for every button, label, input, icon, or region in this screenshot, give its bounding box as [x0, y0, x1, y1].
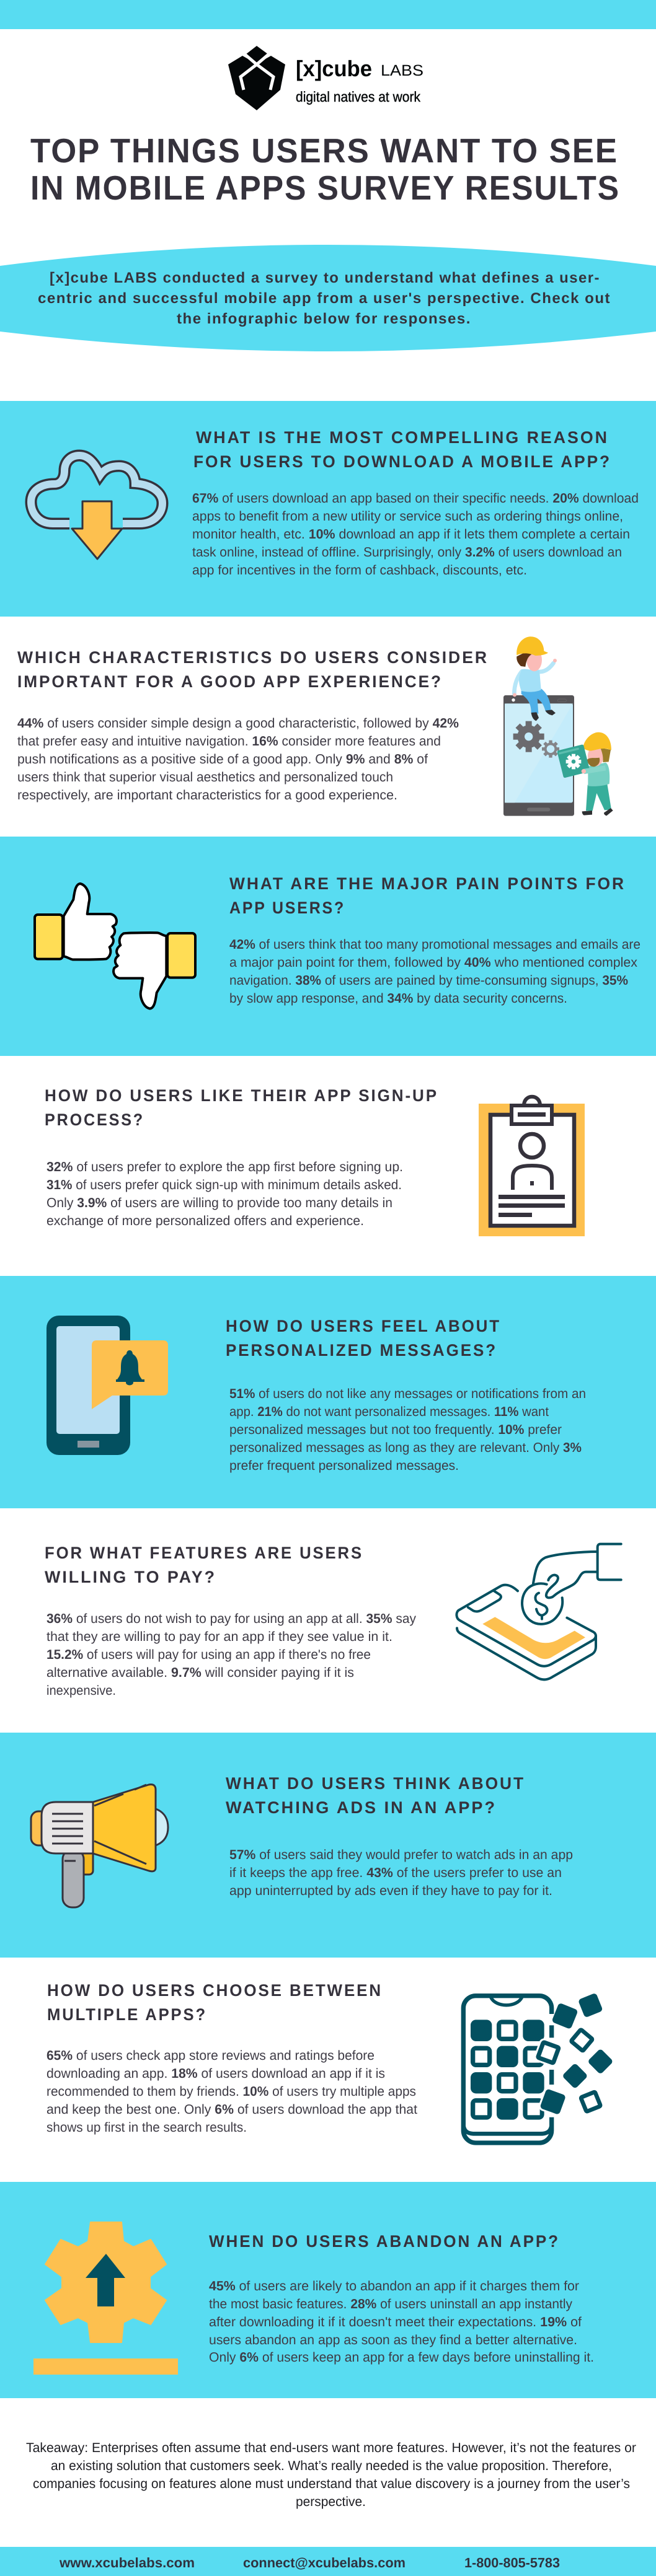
panel: compelling reason: [0, 401, 656, 617]
thumb up: [35, 884, 117, 960]
heading: WILLING TO PAY?: [45, 1568, 216, 1586]
title: TOP THINGS USERS WANT TO SEE: [30, 131, 618, 170]
heading: MULTIPLE APPS?: [47, 2005, 207, 2024]
panel: willing to pay: [45, 1544, 621, 1698]
phone number: 1-800-805-5783: [464, 2555, 560, 2570]
heading: WHICH CHARACTERISTICS DO USERS CONSIDER: [17, 648, 489, 667]
body text: app. 21% do not want personalized messages. 11% want: [229, 1404, 549, 1419]
body text: [47, 1159, 403, 1228]
body text: if it keeps the app free. 43% of the users prefer to use an: [229, 1865, 562, 1880]
body text: prefer frequent personalized messages.: [229, 1458, 459, 1473]
body text: that prefer easy and intuitive navigation. 16% consider more features and: [17, 734, 441, 749]
title: [30, 131, 620, 207]
panel background: [0, 2182, 656, 2398]
body text: respectively, are important characteristics for a good experience.: [17, 788, 397, 802]
panel: pain points: [0, 837, 656, 1056]
body text: 67% of users download an app based on their specific needs. 20% download: [192, 491, 639, 506]
heading: [226, 1317, 501, 1360]
heading: WHAT IS THE MOST COMPELLING REASON: [196, 428, 609, 447]
heading: HOW DO USERS FEEL ABOUT: [226, 1317, 501, 1335]
body text: 65% of users check app store reviews and ratings before: [47, 2048, 375, 2063]
body text: push notifications as a positive side of a good app. Only 9% and 8% of: [17, 752, 428, 767]
body text: personalized messages but not too frequently. 10% prefer: [229, 1422, 562, 1437]
intro text: the infographic below for responses.: [177, 310, 471, 327]
body text: and keep the best one. Only 6% of users download the app that: [47, 2102, 417, 2117]
heading: APP USERS?: [229, 899, 345, 917]
body text: app for incentives in the form of cashback, discounts, etc.: [192, 563, 527, 578]
body text: task online, instead of offline. Surprisingly, only 3.2% of users download an: [192, 545, 622, 560]
body text: 57% of users said they would prefer to watch ads in an app: [229, 1847, 573, 1862]
body text: Only 3.9% of users are willing to provide too many details in: [47, 1195, 392, 1210]
panel background: [0, 837, 656, 1056]
icon: hand dropping coin into phone: [456, 1544, 621, 1679]
takeaway text: [26, 2440, 636, 2509]
phone: [503, 695, 574, 816]
intro text: [38, 270, 611, 327]
icon: xcube logo mark: [228, 46, 285, 110]
icon: thumbs up and down: [35, 884, 195, 1009]
panel: sign-up process: [45, 1086, 585, 1236]
heading: PROCESS?: [45, 1110, 144, 1129]
body text: [209, 2279, 594, 2365]
heading: HOW DO USERS LIKE THEIR APP SIGN-UP: [45, 1086, 438, 1105]
logo labs: LABS: [381, 62, 423, 79]
icon: phone with bell notification: [47, 1316, 168, 1455]
heading: [229, 874, 626, 917]
icon: megaphone: [31, 1785, 168, 1907]
body text: 51% of users do not like any messages or notifications from an: [229, 1386, 586, 1401]
body text: apps to benefit from a new utility or service such as ordering things online,: [192, 509, 623, 524]
takeaway text: an existing solution that customers seek. What’s really needed is the value proposition. Therefore,: [51, 2458, 612, 2473]
heading: FOR USERS TO DOWNLOAD A MOBILE APP?: [193, 452, 611, 471]
panel: abandon an app: [0, 2182, 656, 2398]
takeaway text: perspective.: [296, 2494, 366, 2509]
heading: WATCHING ADS IN AN APP?: [226, 1798, 497, 1817]
body text: 36% of users do not wish to pay for using an app at all. 35% say: [47, 1611, 416, 1626]
panel: personalized messages: [0, 1276, 656, 1508]
body text: alternative available. 9.7% will consider paying if it is: [47, 1665, 354, 1680]
heading: WHAT ARE THE MAJOR PAIN POINTS FOR: [229, 874, 626, 893]
body text: [47, 2048, 417, 2135]
worker sitting on phone: [513, 636, 557, 721]
body text: [192, 491, 639, 578]
logo tagline: digital natives at work: [296, 89, 420, 105]
footer: [0, 2547, 656, 2576]
body text: [17, 716, 459, 802]
body text: a major pain point for them, followed by 40% who mentioned complex: [229, 955, 637, 970]
body text: after downloading it if it doesn't meet their expectations. 19% of: [209, 2314, 582, 2329]
email: connect@xcubelabs.com: [243, 2555, 406, 2570]
body text: recommended to them by friends. 10% of users try multiple apps: [47, 2084, 416, 2099]
panel background: [0, 1733, 656, 1958]
worker with tablet: [557, 732, 613, 815]
body text: 31% of users prefer quick sign-up with minimum details asked.: [47, 1177, 402, 1192]
body text: 44% of users consider simple design a good characteristic, followed by 42%: [17, 716, 459, 731]
body text: by slow app response, and 34% by data security concerns.: [229, 991, 567, 1006]
heading: WHAT DO USERS THINK ABOUT: [226, 1774, 525, 1793]
logo: [228, 46, 423, 110]
body text: [229, 1847, 573, 1898]
icon: clipboard profile: [479, 1097, 585, 1236]
body text: 45% of users are likely to abandon an app if it charges them for: [209, 2279, 579, 2293]
banner lens shape: [0, 245, 656, 351]
heading: IMPORTANT FOR A GOOD APP EXPERIENCE?: [17, 672, 443, 691]
body text: exchange of more personalized offers and experience.: [47, 1213, 364, 1228]
body text: users abandon an app as soon as they find a better alternative.: [209, 2332, 577, 2347]
website: www.xcubelabs.com: [59, 2555, 195, 2570]
heading: PERSONALIZED MESSAGES?: [226, 1341, 497, 1360]
body text: users think that superior visual aesthetics and personalized touch: [17, 770, 393, 785]
icon: gear with up arrow: [33, 2222, 178, 2375]
heading: WHEN DO USERS ABANDON AN APP?: [209, 2232, 560, 2251]
heading: [47, 1981, 383, 2024]
body text: that they are willing to pay for an app if they see value in it.: [47, 1629, 392, 1644]
top bar: [0, 0, 656, 29]
body text: 32% of users prefer to explore the app first before signing up.: [47, 1159, 403, 1174]
panel: characteristics: [17, 636, 613, 816]
heading: HOW DO USERS CHOOSE BETWEEN: [47, 1981, 383, 2000]
heading: [193, 428, 611, 471]
takeaway text: companies focusing on features alone must understand that value discovery is a journey from the user’s: [33, 2476, 630, 2491]
body text: [229, 1386, 586, 1473]
heading: [17, 648, 489, 691]
intro banner: [0, 245, 656, 351]
title: IN MOBILE APPS SURVEY RESULTS: [30, 169, 620, 207]
heading: [45, 1544, 363, 1586]
takeaway text: Takeaway: Enterprises often assume that end-users want more features. However, it’s not the features or: [26, 2440, 636, 2455]
footer band: [0, 2547, 656, 2576]
logo wordmark: [x]cube: [296, 56, 372, 81]
thumb down: [113, 933, 195, 1009]
heading: [226, 1774, 525, 1817]
body text: personalized messages as long as they are relevant. Only 3%: [229, 1440, 582, 1455]
body text: 15.2% of users will pay for using an app if there's no free: [47, 1647, 371, 1662]
gears: [513, 721, 559, 758]
panel: watching ads: [0, 1733, 656, 1958]
body text: monitor health, etc. 10% download an app if it lets them complete a certain: [192, 527, 630, 542]
body text: navigation. 38% of users are pained by time-consuming signups, 35%: [229, 973, 628, 988]
panel: multiple apps: [47, 1981, 614, 2143]
panel background: [0, 401, 656, 617]
heading: [45, 1086, 438, 1129]
body text: [47, 1611, 416, 1698]
body text: app uninterrupted by ads even if they have to pay for it.: [229, 1883, 552, 1898]
intro text: centric and successful mobile app from a user's perspective. Check out: [38, 290, 611, 307]
heading: FOR WHAT FEATURES ARE USERS: [45, 1544, 363, 1562]
body text: Only 6% of users keep an app for a few days before uninstalling it.: [209, 2350, 594, 2365]
icon: phone with app tiles: [463, 1993, 614, 2143]
body text: the most basic features. 28% of users uninstall an app instantly: [209, 2297, 572, 2311]
body text: downloading an app. 18% of users download an app if it is: [47, 2066, 385, 2081]
intro text: [x]cube LABS conducted a survey to understand what defines a user-: [50, 270, 600, 286]
illustration: phone with two workers: [503, 636, 613, 816]
icon: cloud download: [31, 455, 162, 559]
body text: [229, 937, 640, 1006]
body text: 42% of users think that too many promotional messages and emails are: [229, 937, 640, 952]
body text: inexpensive.: [47, 1683, 116, 1698]
body text: shows up first in the search results.: [47, 2120, 247, 2135]
panel background: [0, 1276, 656, 1508]
